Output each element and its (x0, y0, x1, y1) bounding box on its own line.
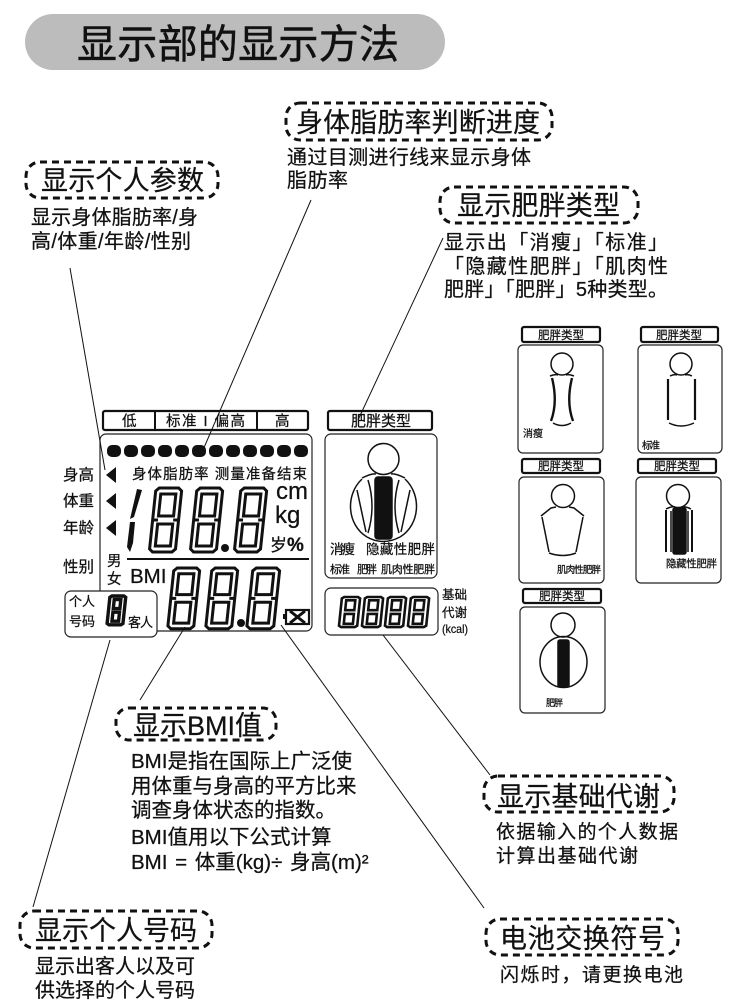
LCD main panel: kg (275, 502, 300, 529)
type card: obese (520, 589, 605, 713)
type card: hidden obesity: 肥胖类型 (654, 459, 700, 473)
callout: basal metabolism: 依据输入的个人数据 (496, 821, 678, 843)
callout: body fat progress: 身体脂肪率判断进度 (296, 108, 540, 138)
callout: basal metabolism: 显示基础代谢 (497, 782, 660, 812)
type card: standard (638, 327, 722, 453)
basal metabolism display: (kcal) (442, 622, 468, 636)
side labels: 性别 (63, 558, 94, 576)
type card: thin: 消瘦 (523, 427, 543, 440)
side labels (63, 466, 94, 576)
personal number box: 个人 (69, 594, 95, 609)
side labels: 年龄 (63, 519, 94, 537)
basal metabolism display (325, 588, 468, 636)
callout: BMI: 用体重与身高的平方比来 (131, 775, 356, 798)
side labels: 体重 (63, 492, 94, 510)
callout: basal metabolism: 计算出基础代谢 (496, 845, 638, 867)
callout: personal parameters: 显示身体脂肪率/身 (31, 206, 198, 229)
callout: body type: 「隐藏性肥胖」「肌肉性 (444, 255, 668, 278)
personal number box: 客人 (128, 615, 153, 630)
body type panel: 肌肉性肥胖 (381, 562, 435, 576)
body type panel: 消瘦 (330, 541, 355, 557)
callout: battery replacement (486, 919, 683, 986)
level bar (103, 411, 308, 430)
status labels: 身体脂肪率 测量准备结束 (132, 466, 307, 483)
BMI label: BMI (130, 565, 166, 588)
callout: personal parameters: 高/体重/年龄/性别 (31, 230, 191, 253)
type card: hidden obesity (636, 459, 721, 583)
leader lines (33, 200, 490, 908)
callout: body fat progress: 脂肪率 (287, 169, 348, 192)
type card: thin: 肥胖类型 (538, 328, 584, 342)
callout: body type: 肥胖」「肥胖」5种类型。 (444, 278, 668, 301)
type card: muscular: 肥胖类型 (538, 459, 584, 473)
callout: body type (440, 187, 668, 301)
LCD main panel: 岁 (270, 536, 287, 555)
body type panel (325, 434, 437, 578)
figure: body (351, 444, 416, 542)
callout: personal number: 供选择的个人号码 (35, 979, 195, 1002)
callout: body type: 显示肥胖类型 (457, 191, 620, 221)
body type panel: 隐藏性肥胖 (366, 542, 435, 557)
body type panel: 肥胖 (357, 563, 377, 576)
personal number box: 号码 (69, 614, 95, 629)
type card: thin (518, 327, 603, 453)
type card: muscular: 肌肉性肥胖 (557, 564, 601, 576)
icon: battery (283, 610, 309, 624)
side labels: 身高 (63, 466, 94, 484)
type card: hidden obesity: 隐藏性肥胖 (666, 557, 718, 570)
callout: BMI: BMI是指在国际上广泛使 (131, 750, 352, 773)
callout: basal metabolism (484, 776, 678, 867)
callout: body fat progress: 通过目测进行线来显示身体 (287, 146, 531, 169)
progress dots (107, 445, 308, 457)
callout: BMI (116, 708, 369, 874)
callout: personal number: 显示出客人以及可 (35, 955, 195, 978)
units: cm (276, 478, 308, 505)
body type header (328, 411, 432, 430)
level bar: 标准 I 偏高 (166, 413, 245, 430)
type card: obese: 肥胖 (546, 698, 563, 708)
callout: battery replacement: 闪烁时，请更换电池 (500, 964, 683, 986)
callout: personal parameters: 显示个人参数 (41, 166, 204, 196)
callout: battery replacement: 电池交换符号 (500, 924, 665, 954)
type card: standard: 标准 (642, 440, 660, 452)
basal metabolism display: 代谢 (442, 605, 467, 620)
callout: BMI: 调查身体状态的指数。 (131, 799, 336, 822)
level bar: 低 (122, 413, 137, 430)
callout: personal parameters (26, 162, 218, 253)
body type header: 肥胖类型 (351, 413, 411, 430)
LCD main panel: % (287, 535, 304, 556)
type card: obese: 肥胖类型 (539, 589, 585, 603)
title (25, 14, 445, 70)
indicator arrows (106, 467, 116, 536)
gender: 男 (107, 554, 122, 570)
callout: personal number: 显示个人号码 (35, 916, 197, 946)
title: 显示部的显示方法 (77, 23, 399, 67)
body type panel: 标准 (330, 562, 350, 576)
type card: muscular (519, 459, 604, 583)
level bar: 高 (275, 413, 290, 430)
LCD main panel (100, 434, 312, 631)
basal metabolism display: 基础 (442, 588, 467, 602)
callout: BMI: 显示BMI值 (133, 711, 262, 741)
callout: BMI: BMI值用以下公式计算 (131, 826, 331, 849)
callout: BMI: BMI = 体重(kg)÷ 身高(m)² (131, 851, 369, 874)
personal number box (65, 591, 157, 637)
digit display: 188.8 (127, 488, 267, 552)
LCD main panel: 女 (107, 570, 122, 588)
callout: body fat progress (286, 103, 552, 192)
callout: personal number (20, 911, 212, 1002)
digit display: 88.8 (168, 568, 280, 629)
callout: body type: 显示出「消瘦」「标准」 (444, 231, 668, 254)
type card: standard: 肥胖类型 (656, 328, 702, 342)
